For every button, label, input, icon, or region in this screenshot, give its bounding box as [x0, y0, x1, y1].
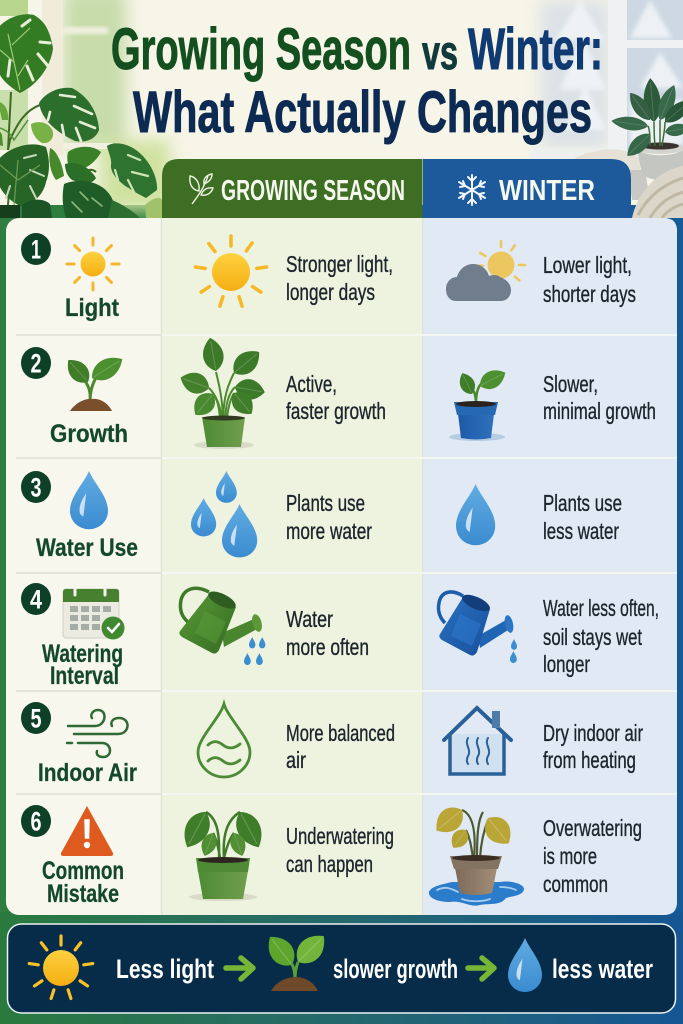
arrow	[468, 958, 494, 979]
text: more balanced air: air	[286, 747, 306, 773]
icon: small sun	[67, 238, 119, 290]
number 1	[21, 233, 51, 265]
arrow	[226, 958, 253, 979]
text: plants use less water	[543, 490, 622, 544]
text: stronger light: Stronger light,	[286, 251, 393, 277]
number 4: 4	[30, 584, 42, 614]
icon: yellowing plant with puddle	[429, 801, 524, 906]
icon: calendar with check	[63, 584, 124, 640]
row 6: common mistake	[21, 801, 642, 908]
label: Watering Interval: Watering	[42, 640, 123, 668]
text: plants use less water: less water	[543, 518, 619, 544]
text: water less often	[543, 595, 659, 677]
icon: water drop	[70, 471, 108, 529]
number 5: 5	[30, 704, 42, 734]
label: Watering Interval: Interval	[50, 662, 119, 690]
icon: blue watering can with few drops	[438, 591, 517, 663]
number 5	[21, 702, 51, 734]
monstera plant, left	[0, 14, 162, 218]
number 2: 2	[30, 348, 42, 378]
text: overwatering: common	[543, 871, 608, 897]
number 6: 6	[30, 806, 42, 836]
number 1: 1	[31, 234, 41, 264]
label: Growth: Growth	[50, 420, 128, 448]
icon: leafy green plant in pot	[177, 336, 267, 449]
text: underwatering: can happen	[286, 851, 373, 877]
text: plants use more water: Plants use	[286, 490, 365, 516]
icon: green watering can with many drops	[179, 588, 265, 665]
number 2	[21, 347, 51, 379]
icon: small sprout in blue pot	[449, 365, 509, 441]
label: Indoor Air: Indoor Air	[38, 759, 137, 787]
text: water less often: longer	[543, 651, 590, 677]
title: vs	[422, 27, 458, 80]
text: more balanced air: More balanced	[286, 720, 395, 746]
icon: sprout	[261, 928, 332, 991]
row 5: indoor air	[21, 702, 643, 787]
text: underwatering	[286, 823, 394, 877]
icon: humidity drop outline	[198, 704, 250, 777]
text: overwatering	[543, 815, 642, 897]
row 1: light	[21, 233, 636, 322]
text: overwatering: Overwatering	[543, 815, 642, 841]
text: active growth: Active,	[286, 371, 337, 397]
text: water more often: Water	[286, 606, 333, 632]
number 4	[21, 583, 51, 615]
comparison table panel	[6, 218, 677, 915]
text: underwatering: Underwatering	[286, 823, 394, 849]
label: Common Mistake: Mistake	[47, 880, 119, 908]
text: dry indoor air	[543, 720, 643, 773]
text: active growth	[286, 371, 386, 424]
icon: warning triangle	[61, 806, 113, 856]
title: Growing Season	[111, 17, 411, 82]
text: stronger light: longer days	[286, 279, 375, 305]
icon: single water drop	[456, 484, 495, 545]
text: lower light: Lower light,	[543, 252, 632, 278]
text: plants use more water	[286, 490, 372, 544]
label: Water Use: Water Use	[36, 534, 138, 562]
label: Light: Light	[65, 294, 120, 322]
icon: sun	[29, 936, 93, 998]
number 3	[21, 471, 51, 503]
label: Common Mistake: Common	[42, 857, 124, 885]
bottom summary bar	[8, 924, 676, 1013]
winter plant and knit blanket, right	[575, 77, 683, 218]
header: winter: WINTER	[499, 175, 595, 207]
icon: three water drops	[191, 471, 257, 557]
text: plants use more water: more water	[286, 518, 372, 544]
icon: droopy plant in green pot	[177, 807, 269, 901]
text: more balanced air	[286, 720, 395, 773]
icon: sprout in soil	[62, 351, 127, 411]
icon: strong sun	[195, 236, 267, 306]
column header tab	[162, 159, 631, 218]
text: slower growth: Slower,	[543, 371, 598, 397]
text: less water: less water	[552, 954, 653, 984]
icon: cloud and pale sun	[446, 241, 525, 301]
header: growing season	[162, 159, 422, 218]
number 3: 3	[30, 472, 42, 502]
label: Common Mistake	[42, 857, 124, 908]
text: stronger light	[286, 251, 393, 305]
header: growing season: GROWING SEASON	[221, 175, 405, 207]
row 4: watering interval	[21, 583, 659, 690]
text: slower growth: slower growth	[333, 954, 458, 984]
text: active growth: faster growth	[286, 398, 386, 424]
text: lower light	[543, 252, 636, 307]
text: water less often: soil stays wet	[543, 624, 642, 650]
row 2: growth	[21, 336, 656, 449]
text: overwatering: is more	[543, 843, 597, 869]
text: less light: Less light	[116, 954, 214, 984]
text: water more often: more often	[286, 634, 369, 660]
number 6	[21, 805, 51, 837]
icon: wind lines	[67, 710, 128, 757]
icon: water drop	[508, 938, 542, 992]
text: slower growth	[543, 371, 656, 424]
label: Watering Interval	[42, 640, 123, 690]
text: water more often	[286, 606, 369, 660]
text: dry indoor air: from heating	[543, 747, 636, 773]
title	[111, 17, 603, 145]
text: lower light: shorter days	[543, 281, 636, 307]
row 3: water use	[21, 471, 622, 562]
text: plants use less water: Plants use	[543, 490, 622, 516]
header: winter	[423, 159, 631, 218]
text: dry indoor air: Dry indoor air	[543, 720, 643, 746]
title: Winter:	[468, 17, 603, 82]
icon: house with heat waves	[444, 708, 511, 774]
